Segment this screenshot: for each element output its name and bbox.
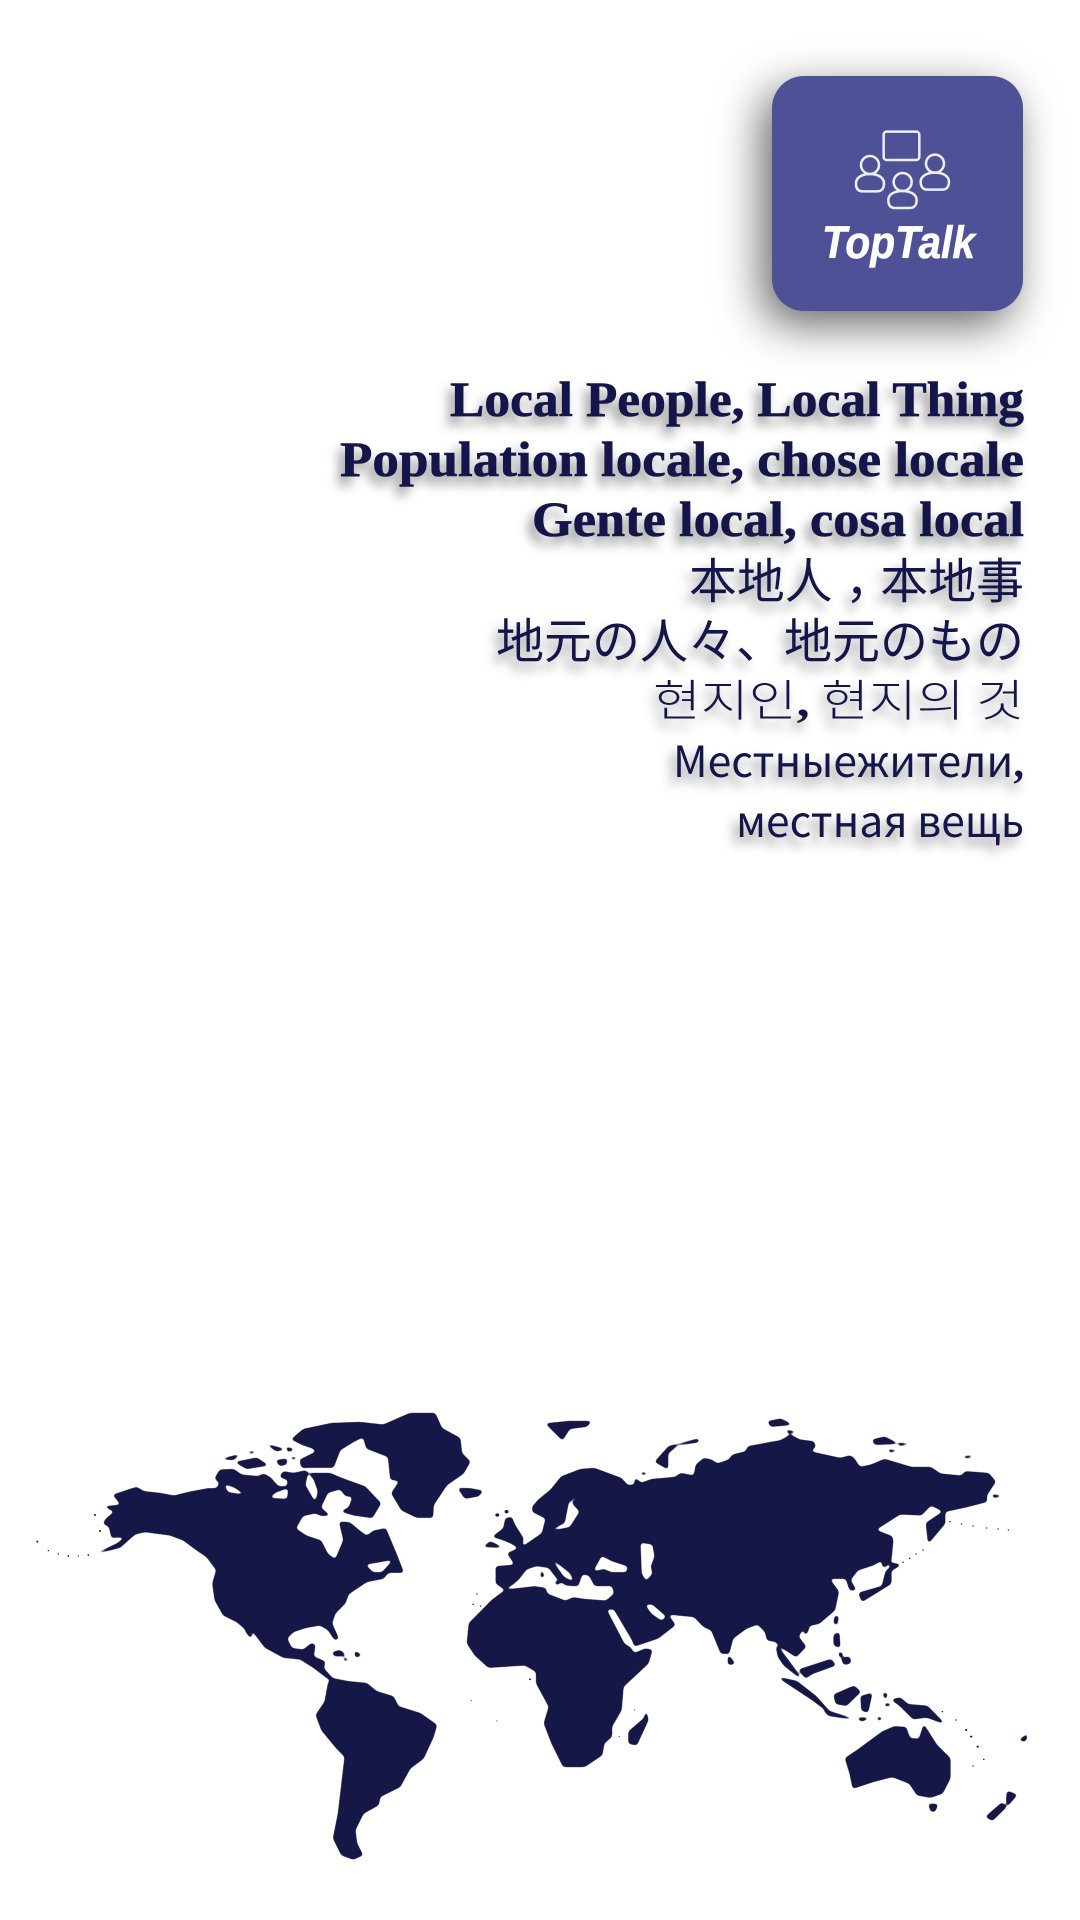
icon: screen and three people (856, 132, 949, 208)
Arctic islands (547, 1419, 1001, 1497)
Madagascar (629, 1712, 648, 1745)
heading: Chinese: 本地事 (880, 542, 1024, 612)
South America (316, 1678, 437, 1859)
map: Americas (97, 1413, 483, 1859)
Greenland and Ellesmere (292, 1413, 470, 1517)
logo: TopTalk app icon (772, 76, 1023, 311)
heading: Russian line two: местная вещь (736, 788, 1024, 850)
heading: Russian line one: Местныежители, (673, 728, 1024, 790)
Kamchatka, Sakhalin, Japan (860, 1512, 944, 1601)
logo wordmark: TopTalk (822, 217, 977, 268)
heading: English: Local People, Local Thing (450, 371, 1024, 427)
inland seas (506, 1493, 665, 1652)
Mediterranean islands (541, 1570, 562, 1585)
heading: Spanish: Gente local, cosa local (532, 491, 1024, 547)
Eurasia and Africa (467, 1435, 995, 1767)
heading: French: Population locale, chose locale (340, 431, 1024, 487)
map: small island dots (36, 1510, 1009, 1767)
Baja (245, 1627, 252, 1637)
Arctic islands (223, 1445, 297, 1468)
North America (97, 1469, 403, 1679)
heading: Chinese: 本地人 (689, 542, 833, 612)
title block: multilingual headings (332, 371, 1024, 856)
heading: Korean: 현지인 , 현지의 것 (653, 665, 1024, 729)
heading: Chinese (689, 542, 1024, 626)
world map (36, 1412, 1028, 1860)
New Zealand and New Caledonia (987, 1735, 1027, 1820)
Britain and Ireland (484, 1517, 523, 1549)
Iceland (458, 1488, 483, 1498)
Australia (845, 1725, 950, 1812)
Southeast Asia islands (729, 1617, 942, 1722)
heading: Japanese: 地元の人々、地元のもの (496, 602, 1024, 672)
Caribbean (333, 1651, 361, 1661)
Hudson Bay and straits (225, 1474, 392, 1572)
map: Eurasia, Africa and Oceania (467, 1419, 1027, 1820)
heading: Chinese: ， (833, 556, 880, 626)
map: landmasses (0, 1390, 1080, 1920)
